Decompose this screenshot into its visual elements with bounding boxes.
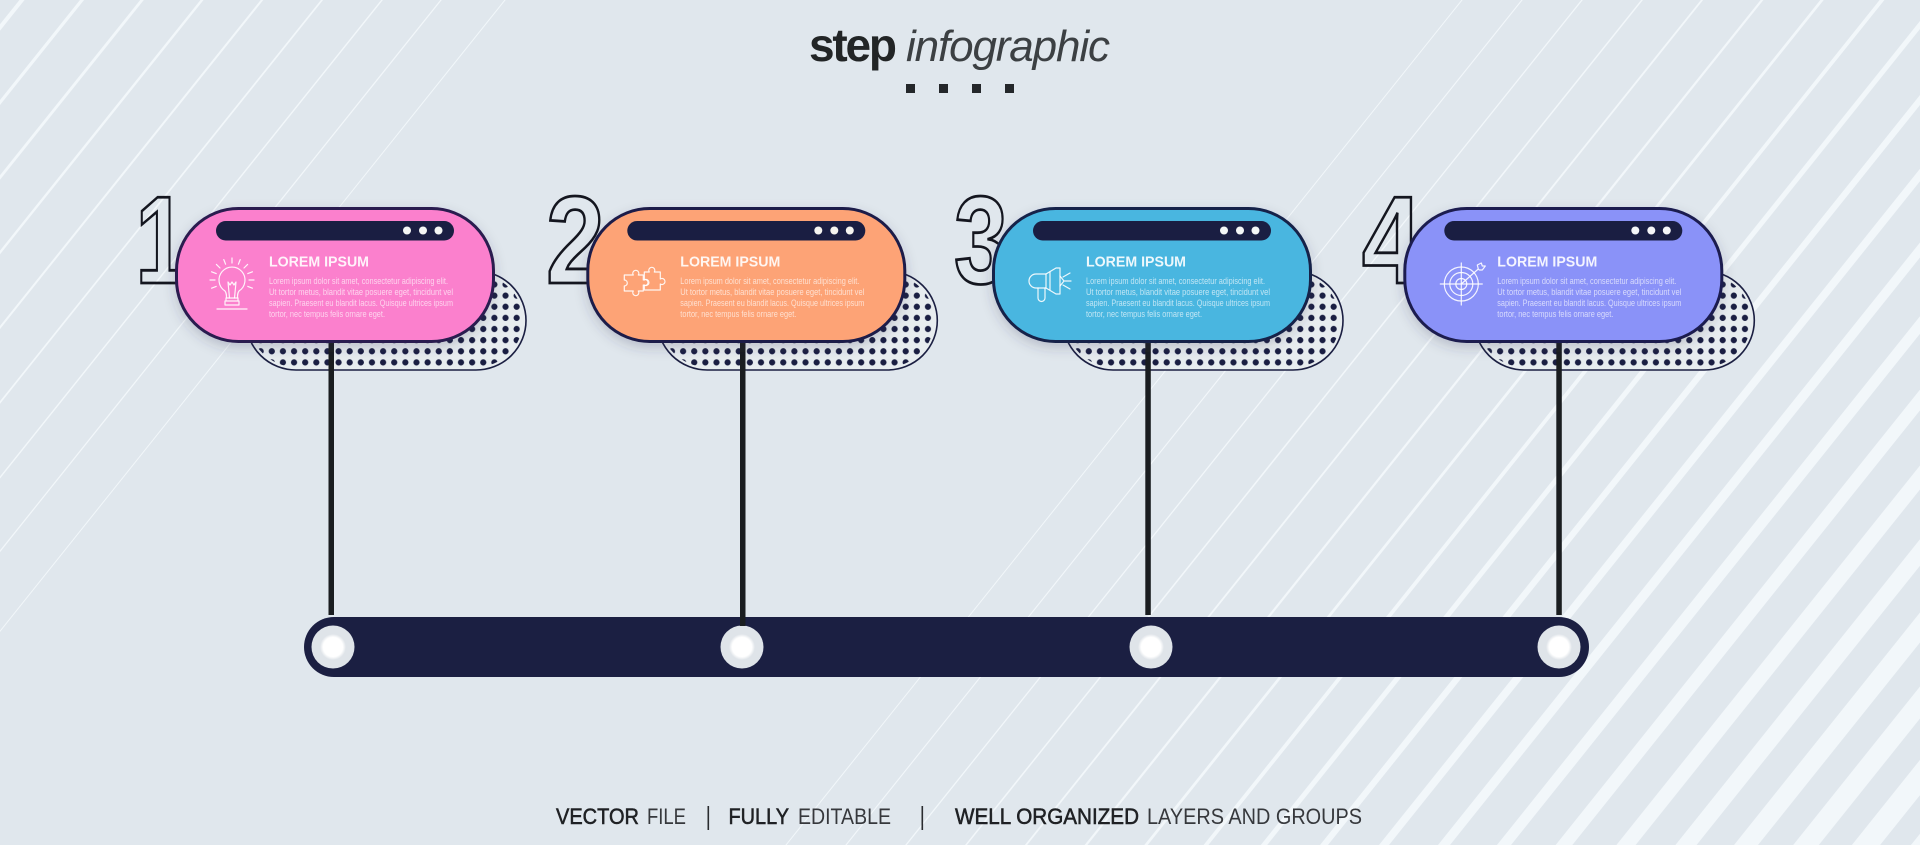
body text: Ut tortor metus, blandit vitae posuere eget, tincidunt vel <box>1497 287 1681 298</box>
body text: sapien. Praesent eu blandit lacus. Quisque ultrices ipsum <box>1497 298 1681 309</box>
step 1 <box>136 172 526 615</box>
body text: Ut tortor metus, blandit vitae posuere eget, tincidunt vel <box>269 287 453 298</box>
body text <box>680 276 864 320</box>
body text: tortor, nec tempus felis ornare eget. <box>269 309 385 320</box>
footer text: FULLY <box>728 804 789 829</box>
footer text <box>556 804 1362 830</box>
body text: sapien. Praesent eu blandit lacus. Quisque ultrices ipsum <box>680 298 864 309</box>
body text: tortor, nec tempus felis ornare eget. <box>680 309 796 320</box>
title: step <box>809 19 897 71</box>
icon: target <box>1440 263 1485 305</box>
footer text: WELL ORGANIZED <box>955 804 1139 829</box>
icon: light bulb <box>210 258 254 309</box>
dotted backing pill <box>1063 271 1343 370</box>
footer text: EDITABLE <box>798 804 891 829</box>
title: infographic <box>906 22 1110 71</box>
footer text: VECTOR <box>556 804 639 829</box>
blue card <box>994 208 1310 342</box>
body text: sapien. Praesent eu blandit lacus. Quisque ultrices ipsum <box>269 298 453 309</box>
title <box>809 19 1110 71</box>
body text: Ut tortor metus, blandit vitae posuere eget, tincidunt vel <box>1086 287 1270 298</box>
connector line <box>1145 335 1151 615</box>
footer text: LAYERS AND GROUPS <box>1147 804 1362 829</box>
number 1: 1 <box>136 172 187 310</box>
dotted backing pill <box>246 271 526 370</box>
heading: LOREM IPSUM <box>1086 254 1186 270</box>
number 4: 4 <box>1362 170 1421 310</box>
body text <box>1086 276 1270 320</box>
body text: sapien. Praesent eu blandit lacus. Quisque ultrices ipsum <box>1086 298 1270 309</box>
header bar <box>627 221 865 240</box>
heading: LOREM IPSUM <box>680 254 780 270</box>
header bar <box>1033 221 1271 240</box>
body text: Ut tortor metus, blandit vitae posuere eget, tincidunt vel <box>680 287 864 298</box>
body text: tortor, nec tempus felis ornare eget. <box>1086 309 1202 320</box>
step 3 <box>954 170 1343 615</box>
connector line <box>740 335 746 626</box>
body text <box>1497 276 1681 320</box>
number 3: 3 <box>954 170 1008 310</box>
dotted backing pill <box>1474 271 1754 370</box>
connector line <box>1556 335 1562 615</box>
header bar <box>1444 221 1682 240</box>
step 2 <box>546 172 937 626</box>
dotted backing pill <box>657 271 937 370</box>
number 2: 2 <box>546 172 605 310</box>
connector line <box>328 335 334 615</box>
timeline bar with nodes <box>304 617 1589 677</box>
body text: Lorem ipsum dolor sit amet, consectetur adipiscing elit. <box>1086 276 1265 287</box>
icon: megaphone <box>1029 268 1071 302</box>
heading: LOREM IPSUM <box>269 254 369 270</box>
orange card <box>588 208 905 342</box>
icon: puzzle <box>624 267 665 296</box>
body text: Lorem ipsum dolor sit amet, consectetur adipiscing elit. <box>1497 276 1676 287</box>
body text: tortor, nec tempus felis ornare eget. <box>1497 309 1613 320</box>
body text: Lorem ipsum dolor sit amet, consectetur adipiscing elit. <box>680 276 859 287</box>
body text: Lorem ipsum dolor sit amet, consectetur adipiscing elit. <box>269 276 448 287</box>
step 4 <box>1362 170 1754 615</box>
pink card <box>176 208 494 342</box>
footer text: FILE <box>647 804 686 829</box>
purple card <box>1405 208 1722 342</box>
heading: LOREM IPSUM <box>1497 254 1597 270</box>
title dots <box>906 84 1014 93</box>
header bar <box>216 221 454 240</box>
body text <box>269 276 453 320</box>
